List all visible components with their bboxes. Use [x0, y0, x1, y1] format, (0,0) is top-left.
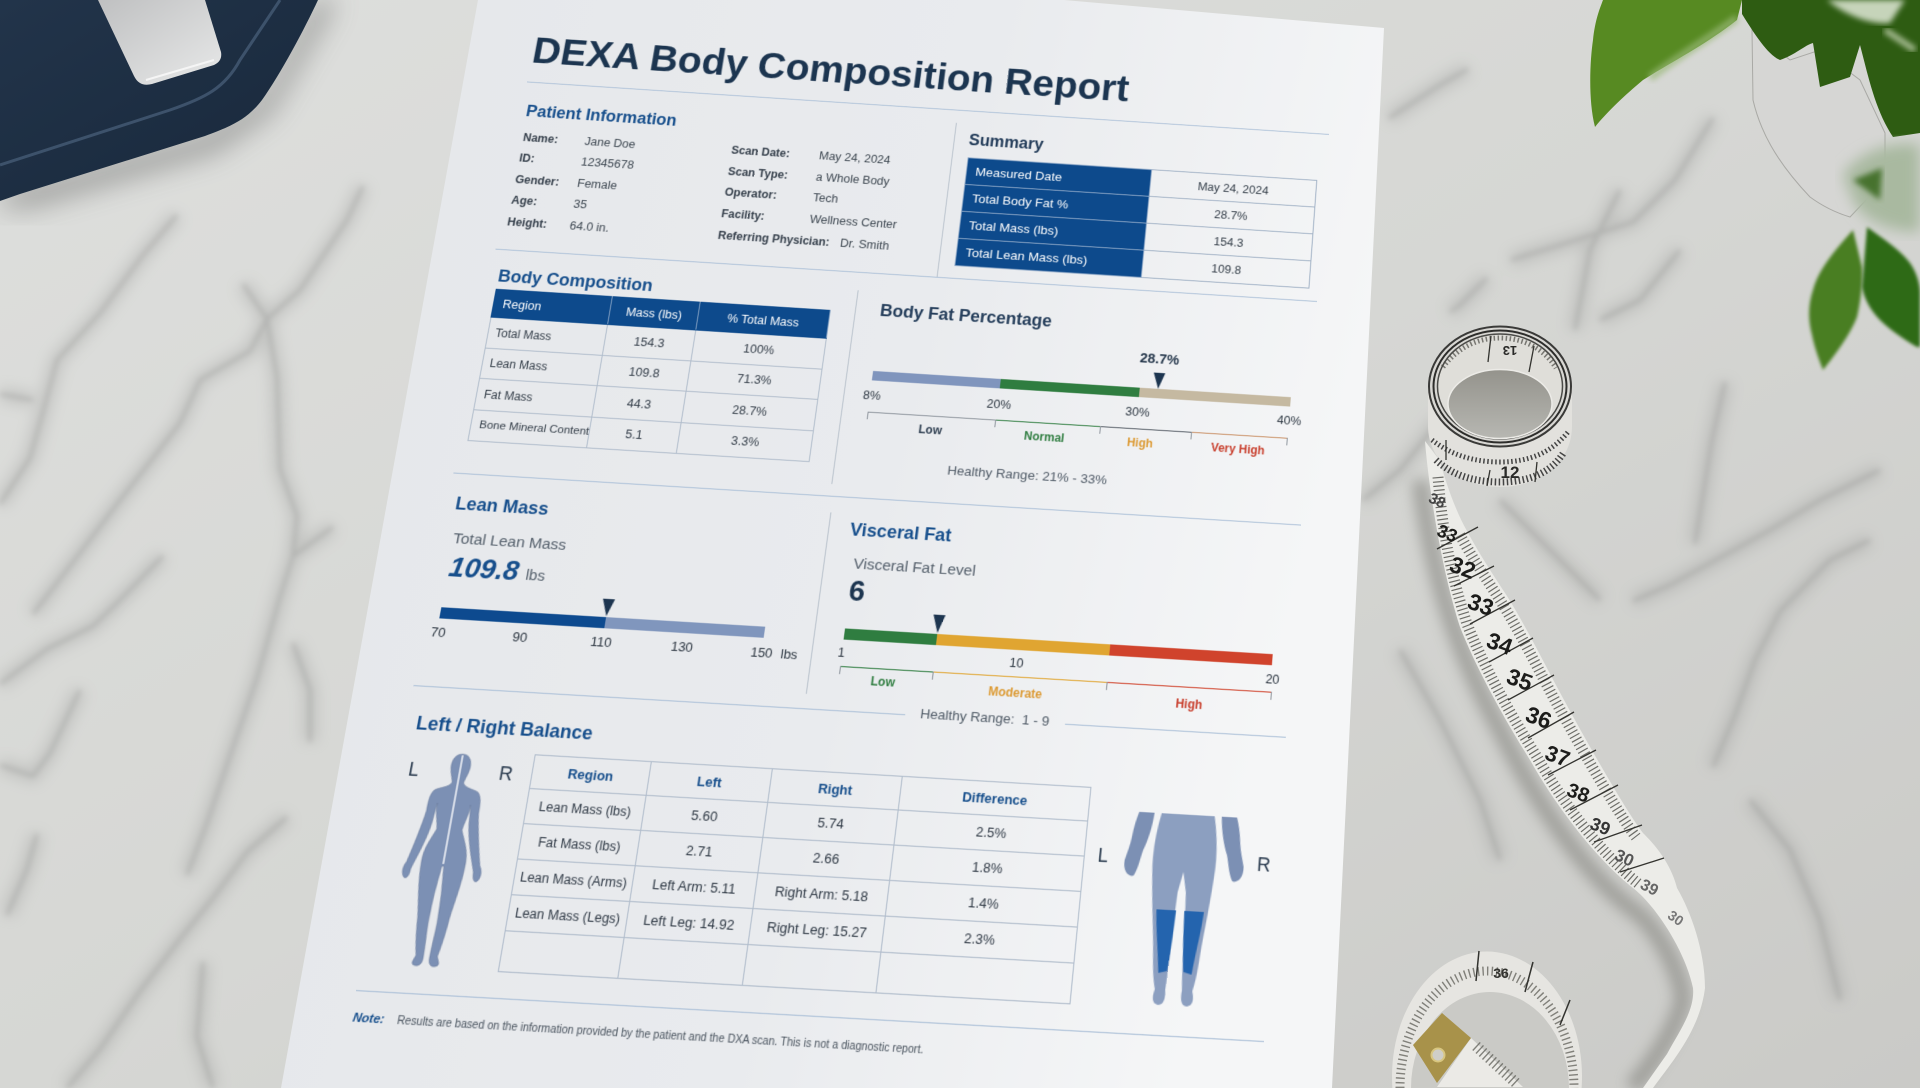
panel: visceral fat: Moderate — [987, 684, 1043, 702]
heading: summary: Summary — [968, 131, 1044, 153]
panel: patient information: Gender: — [514, 173, 560, 188]
panel: lean mass: 110 — [589, 633, 613, 650]
visceral fat bar — [844, 628, 1273, 665]
tape measure ribbon: 37 — [1542, 740, 1573, 772]
table: summary: Total Mass (lbs) — [968, 219, 1059, 238]
tape measure ribbon: 39 — [1587, 813, 1613, 839]
panel: lean mass: 130 — [670, 638, 694, 655]
panel: patient information: Scan Date: — [730, 144, 791, 160]
table: left right balance: Fat Mass (lbs) — [537, 834, 622, 854]
table: body composition: 3.3% — [730, 434, 760, 449]
tape ribbon shadow — [1420, 480, 1683, 1088]
panel: lean mass: Total Lean Mass — [452, 530, 568, 554]
heading: lean mass: Lean Mass — [454, 493, 550, 519]
table: body composition: 154.3 — [633, 335, 665, 350]
table: body composition: 5.1 — [624, 428, 644, 442]
tape measure ribbon: 33 — [1464, 588, 1497, 621]
table: body composition: Total Mass — [494, 326, 553, 343]
table: summary: May 24, 2024 — [1197, 180, 1269, 197]
table: left right balance: 2.5% — [975, 824, 1007, 842]
table: summary: 109.8 — [1211, 262, 1242, 276]
table: left right balance: Left — [696, 773, 723, 791]
heading: visceral fat: Visceral Fat — [849, 518, 953, 545]
table: summary: 28.7% — [1214, 208, 1248, 222]
table: left right balance: Left Arm: 5.11 — [651, 876, 737, 897]
marker — [600, 598, 615, 616]
table: left right balance: Right Leg: 15.27 — [766, 919, 868, 941]
panel: left / right balance: R — [497, 763, 514, 785]
panel: patient information: May 24, 2024 — [818, 149, 891, 166]
panel: visceral fat: Low — [870, 674, 896, 690]
title: DEXA Body Composition Report — [529, 30, 1131, 110]
panel: visceral fat: High — [1175, 696, 1203, 712]
table: body composition: Fat Mass — [483, 388, 534, 404]
tape measure: upper coil: 12 — [1501, 463, 1519, 482]
panel: left / right balance: L — [1097, 845, 1109, 867]
tape measure ribbon — [1425, 441, 1705, 1088]
panel: patient information: Operator: — [724, 186, 778, 202]
table: left right balance — [498, 754, 1092, 1005]
panel: lean mass: 90 — [511, 628, 529, 645]
tape measure: upper coil: 13 — [1503, 343, 1517, 358]
table: body composition: 71.3% — [736, 372, 772, 388]
panel: patient information: Wellness Center — [809, 212, 898, 231]
table: body composition: 44.3 — [626, 396, 652, 411]
table: left right balance: Lean Mass (Arms) — [519, 869, 628, 890]
table: body composition — [467, 288, 831, 462]
panel: lean mass: 150 — [750, 644, 774, 660]
table: body composition: 100% — [742, 342, 775, 357]
healthy range text: Healthy Range: 21% - 33% — [947, 463, 1108, 487]
table: summary: Total Lean Mass (lbs) — [965, 246, 1088, 267]
note: Note: — [352, 1012, 385, 1027]
panel: patient information: Female — [576, 177, 618, 192]
table: summary — [954, 157, 1318, 289]
panel: body fat percentage gauge — [862, 301, 1302, 487]
panel: body fat percentage gauge: 40% — [1277, 413, 1302, 428]
panel: visceral fat: 1 — [837, 645, 846, 660]
figure: full body front view — [401, 753, 482, 968]
panel: patient information: 35 — [572, 198, 588, 211]
table: summary: Measured Date — [975, 165, 1063, 184]
healthy range text: Healthy Range: 1 - 9 — [919, 706, 1050, 729]
marker — [931, 614, 945, 633]
panel: patient information: 12345678 — [580, 156, 635, 171]
body scale — [0, 0, 318, 201]
table: body composition: 109.8 — [628, 365, 660, 381]
table: left right balance: 1.8% — [971, 859, 1003, 877]
panel: body fat percentage gauge: Low — [918, 423, 943, 437]
tape measure: upper coil — [1428, 326, 1572, 487]
panel: body composition — [467, 267, 831, 462]
table: left right balance: Lean Mass (Legs) — [514, 905, 621, 926]
table: left right balance: 2.71 — [685, 842, 714, 860]
heading: patient information: Patient Information — [525, 102, 678, 130]
marker — [1152, 372, 1165, 389]
table: left right balance: 2.66 — [812, 850, 840, 867]
panel: patient information: Referring Physician: — [717, 229, 830, 249]
tape measure ribbon: 34 — [1483, 627, 1516, 660]
panel: body fat percentage gauge: Normal — [1023, 429, 1065, 445]
panel: patient information — [506, 102, 898, 252]
table: summary: Total Body Fat % — [971, 192, 1069, 211]
table: left right balance: Difference — [961, 789, 1028, 808]
panel: body fat percentage gauge: 20% — [986, 396, 1012, 411]
table: left right balance: Right Arm: 5.18 — [774, 883, 869, 905]
panel: patient information: Height: — [506, 215, 548, 231]
value: 28.7%: 28.7% — [1139, 351, 1180, 368]
table: left right balance: 5.60 — [690, 807, 719, 825]
figure: lower body with highlighted calves — [1124, 812, 1244, 1007]
table: left right balance: Lean Mass (lbs) — [538, 799, 632, 819]
heading: left / right balance: Left / Right Balance — [415, 711, 595, 744]
table: left right balance: Right — [817, 780, 853, 798]
gauge bar — [872, 371, 1291, 407]
panel: body fat percentage gauge: 8% — [862, 388, 881, 403]
range bracket — [866, 412, 1288, 446]
tape measure ribbon: 38 — [1426, 490, 1448, 512]
table: left right balance: 1.4% — [967, 894, 1000, 912]
tape measure ribbon: 32 — [1446, 551, 1479, 584]
scale shadow — [0, 0, 335, 205]
tape measure ribbon: 39 — [1637, 876, 1661, 900]
panel: body fat percentage gauge: High — [1126, 435, 1153, 450]
table: body composition: % Total Mass — [726, 311, 800, 329]
panel: body fat percentage gauge: Very High — [1210, 441, 1265, 457]
tape measure: lower coil with brass tab — [1392, 951, 1582, 1088]
range bracket — [838, 666, 1272, 700]
table: summary: 154.3 — [1213, 235, 1244, 249]
table: body composition: Region — [502, 297, 542, 313]
value: 6: 6 — [847, 574, 867, 607]
paper sheet — [281, 0, 1384, 1088]
panel: summary — [954, 131, 1318, 289]
panel: patient information: a Whole Body — [815, 170, 890, 187]
panel: left / right balance: L — [407, 758, 421, 780]
panel: lean mass: lbs — [780, 646, 799, 662]
panel: lean mass — [430, 493, 799, 662]
panel: patient information: ID: — [518, 152, 536, 165]
panel: lean mass: lbs — [524, 566, 547, 584]
note: Results are based on the information provided by the patient and the DXA scan. This is not a diagnostic report. — [396, 1015, 924, 1057]
panel: visceral fat: 10 — [1009, 655, 1024, 670]
panel: patient information: Jane Doe — [584, 135, 637, 150]
tape measure: lower coil with brass tab: 36 — [1493, 965, 1509, 981]
table: body composition: Lean Mass — [489, 357, 548, 374]
panel: visceral fat — [837, 518, 1280, 729]
heading: body composition: Body Composition — [497, 267, 654, 295]
tape measure ribbon: 36 — [1522, 701, 1555, 734]
report page content — [352, 30, 1329, 1057]
table: body composition: Mass (lbs) — [625, 305, 683, 322]
panel: visceral fat: 20 — [1265, 672, 1280, 687]
panel: patient information: 64.0 in. — [569, 219, 610, 234]
tape measure ribbon: 38 — [1564, 779, 1592, 808]
plant leaves — [1590, 0, 1920, 370]
panel: patient information: Tech — [812, 191, 839, 205]
panel: patient information: Name: — [522, 131, 559, 145]
plant pot — [1752, 30, 1885, 217]
panel: lean mass: 70 — [430, 624, 447, 640]
panel: patient information: Facility: — [720, 207, 766, 222]
panel: left / right balance: R — [1256, 853, 1271, 875]
tape measure ribbon: 30 — [1665, 907, 1687, 929]
heading: body fat percentage: Body Fat Percentage — [879, 301, 1053, 330]
panel: body fat percentage gauge: 30% — [1125, 405, 1150, 419]
table: body composition: 28.7% — [731, 403, 768, 419]
lean mass bar — [439, 607, 765, 637]
table: left right balance: Region — [567, 766, 615, 784]
table: left right balance: 2.3% — [963, 930, 996, 948]
panel: patient information: Scan Type: — [727, 165, 789, 181]
panel: visceral fat: Visceral Fat Level — [852, 556, 977, 580]
table: left right balance: 5.74 — [817, 815, 845, 832]
table: left right balance: Left Leg: 14.92 — [642, 912, 735, 933]
tape measure ribbon: 33 — [1434, 520, 1460, 546]
table: body composition: Bone Mineral Content — [478, 420, 590, 438]
tape measure ribbon: 30 — [1612, 845, 1637, 871]
panel: patient information: Dr. Smith — [839, 236, 890, 252]
tape measure ribbon: 35 — [1503, 663, 1536, 696]
panel: left / right balance — [401, 711, 1271, 1007]
value: 109.8 lbs: 109.8 — [447, 551, 522, 587]
panel: patient information: Age: — [510, 194, 538, 208]
